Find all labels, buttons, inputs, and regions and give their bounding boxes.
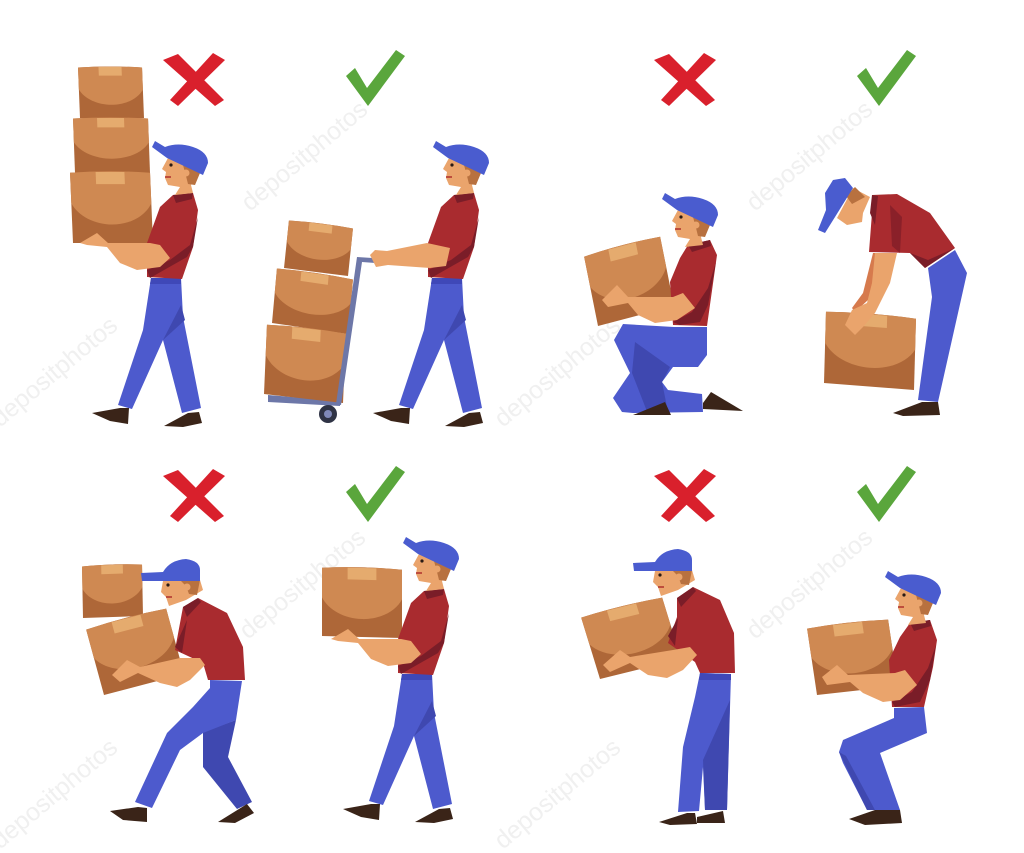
watermark: depositphotos: [236, 95, 373, 217]
figure: worker carrying one box correctly: [322, 537, 459, 823]
icon: wrong, top row 2: [654, 53, 716, 106]
icon: wrong, bottom row 2: [654, 469, 716, 522]
icon: wrong, bottom row 1: [163, 469, 225, 522]
watermark: [0, 95, 878, 853]
figure: worker carrying three stacked boxes: [70, 66, 208, 427]
watermark: depositphotos: [234, 523, 371, 645]
figure: worker kneeling with box: [584, 193, 743, 415]
watermark: depositphotos: [741, 95, 878, 217]
icon: wrong, top row 1: [163, 53, 225, 106]
figure: worker bending over to lift box: [818, 178, 967, 416]
figure: worker leaning back holding box: [581, 549, 735, 825]
icon: right, top row 1: [346, 50, 405, 106]
figure: worker pushing a hand truck with boxes: [264, 141, 489, 427]
icon: right, bottom row 1: [346, 466, 405, 522]
icon: right, top row 2: [857, 50, 916, 106]
watermark: depositphotos: [741, 523, 878, 645]
watermark: depositphotos: [489, 733, 626, 853]
figure: worker squatting with box: [807, 571, 941, 825]
watermark: depositphotos: [489, 311, 626, 433]
icon: right, bottom row 2: [857, 466, 916, 522]
figure: worker carrying two boxes, bent back: [82, 559, 254, 823]
